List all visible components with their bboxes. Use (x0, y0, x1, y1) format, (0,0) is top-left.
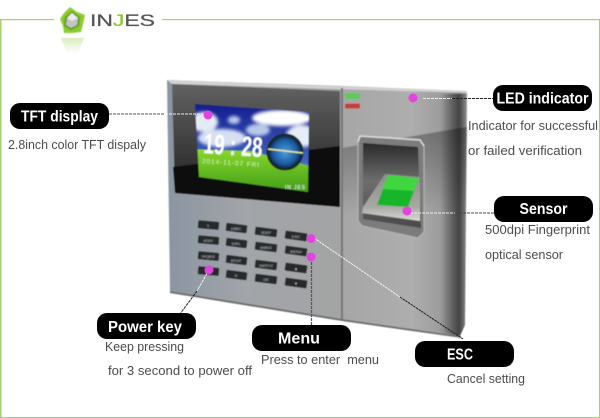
section divider (341, 88, 343, 319)
leader: Menu (310, 258, 312, 325)
leader: LED indicator (423, 98, 494, 100)
callout: Sensor: optical sensor (485, 248, 563, 262)
date: 2014-11-07 FRI (202, 158, 259, 169)
sensor platen (362, 174, 420, 221)
key caps (198, 220, 307, 288)
hotspot dots (204, 94, 418, 274)
fingerprint sensor (358, 136, 424, 238)
key labels: 8TUV (231, 258, 241, 263)
key labels: 9WXYZ (259, 263, 273, 268)
top gloss on right section (342, 127, 467, 215)
icon: logo hexagon (60, 7, 85, 53)
callout: ESC (415, 341, 525, 386)
device body left section (167, 80, 342, 319)
sensor well (363, 143, 421, 228)
callout: LED indicator: LED indicator (496, 90, 588, 108)
green scanner window (377, 175, 419, 207)
key labels: 2ABC (231, 226, 241, 231)
callout: ESC: Cancel setting (447, 372, 525, 386)
key labels: OK (263, 277, 269, 282)
callout: LED indicator (468, 85, 598, 158)
key labels: 3DEF (261, 230, 272, 235)
callout: TFT display (8, 103, 147, 152)
right edge shading (440, 94, 467, 336)
globe clock (268, 134, 303, 170)
screen brand: IN JES (285, 185, 306, 191)
callout: Sensor: Sensor (520, 201, 568, 218)
sensor frame top highlight (358, 136, 424, 146)
key labels: Del (205, 269, 211, 274)
leader: TFT display (105, 113, 204, 115)
callout: Menu: Menu (278, 330, 320, 348)
key labels: ▼ (294, 281, 298, 286)
grass (196, 148, 310, 193)
clock: 19 : 28 (203, 128, 264, 163)
red LED (345, 104, 360, 108)
key labels: 7PQRS (201, 254, 215, 259)
key labels (201, 223, 302, 286)
callout: Menu (252, 325, 379, 367)
LED lights (345, 93, 360, 108)
bezel lower reflection (173, 146, 340, 207)
callout: Power key: Power key (108, 319, 182, 336)
device body right section (342, 86, 467, 336)
callout: Sensor: 500dpi Fingerprint (485, 223, 591, 237)
device bottom edge (170, 291, 462, 338)
callout: LED indicator: or failed verification (468, 144, 582, 158)
leader: Power key (180, 270, 209, 314)
sensor frame (358, 136, 424, 238)
callout: Power key: for 3 second to power off (108, 364, 253, 378)
key labels: 1 (207, 223, 210, 228)
keypad (198, 220, 307, 288)
clouds (190, 110, 318, 147)
sky (194, 104, 310, 170)
callout: Power key: Keep pressing (105, 340, 184, 354)
callout: ESC: ESC (447, 346, 473, 364)
key labels: ▲ (294, 266, 298, 271)
black display bezel (172, 84, 340, 207)
callout: Sensor (485, 196, 593, 262)
key labels: ESC (292, 234, 300, 239)
logo wordmark: IN JES (90, 11, 155, 30)
device top rim (167, 80, 467, 93)
leader: ESC (314, 238, 463, 339)
key labels: 6MNO (260, 245, 272, 250)
callout: TFT display: TFT display (21, 108, 98, 126)
device photo (167, 80, 467, 338)
callout: LED indicator: Indicator for successful (468, 119, 598, 133)
key labels: 4GHI (203, 238, 213, 243)
key labels: 5JKL (231, 241, 241, 246)
key labels: MENU (290, 249, 302, 254)
key labels: 0 (235, 273, 238, 278)
leader: Sensor (410, 212, 495, 214)
green LED (345, 93, 360, 99)
callout: Menu: Press to enter menu (261, 353, 379, 367)
callout: TFT display: 2.8inch color TFT dispaly (8, 138, 147, 152)
TFT screen (194, 104, 310, 193)
callout: Power key (97, 313, 253, 378)
logo: INJES (60, 7, 155, 53)
